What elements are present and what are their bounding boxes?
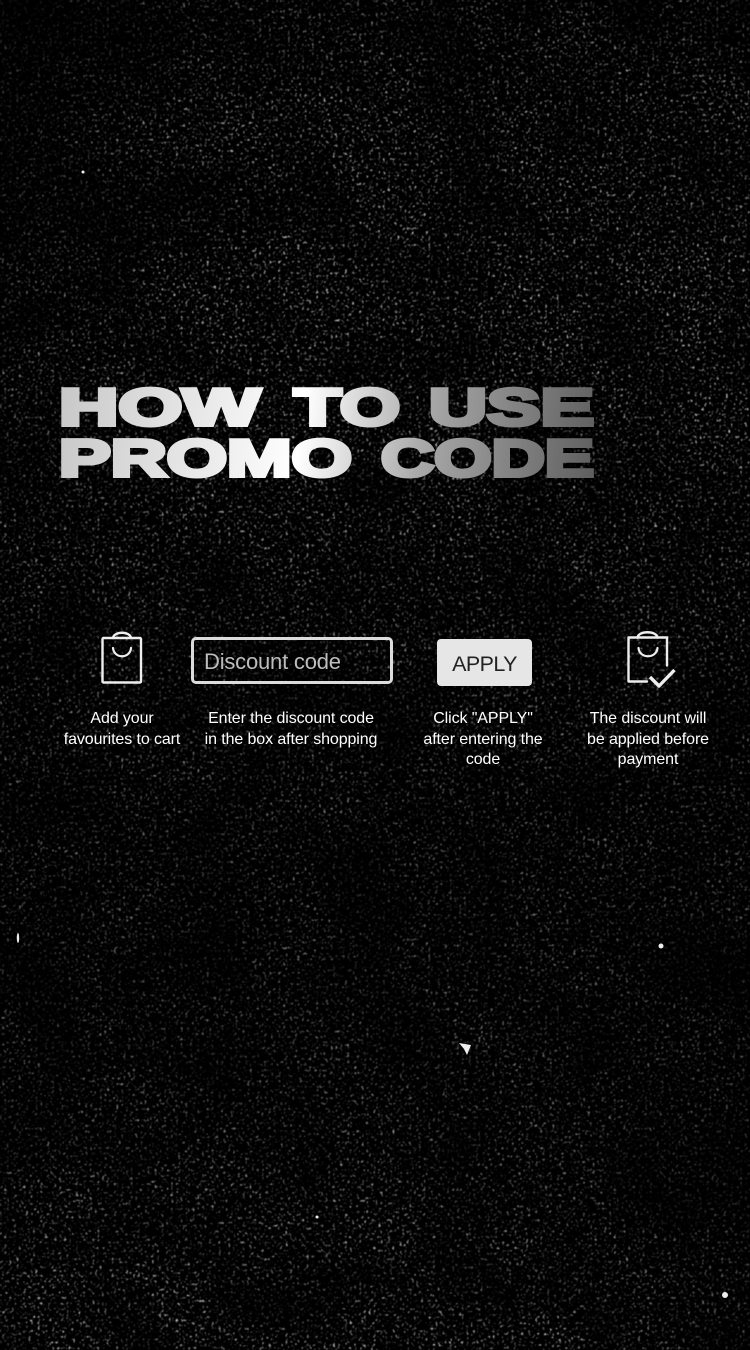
caption: discount applied: be applied before <box>587 730 709 748</box>
title: HOW TO USE PROMO CODE: TO <box>294 379 400 437</box>
caption: enter the code: in the box after shopping <box>205 730 377 748</box>
button: apply <box>437 639 532 686</box>
button: apply: APPLY <box>452 652 517 676</box>
input: discount code box: Discount code <box>204 649 341 674</box>
caption: add to cart <box>64 710 180 748</box>
caption: enter the code <box>205 710 377 748</box>
caption: click apply: Click "APPLY" <box>433 710 533 727</box>
caption: click apply: code <box>466 751 500 768</box>
caption: discount applied <box>587 710 709 768</box>
caption: add to cart: favourites to cart <box>64 730 180 748</box>
caption: click apply <box>423 710 543 768</box>
input: discount code box <box>191 637 393 684</box>
title: HOW TO USE PROMO CODE: USE <box>429 379 594 437</box>
title: HOW TO USE PROMO CODE: PROMO <box>59 430 352 488</box>
title: HOW TO USE PROMO CODE: CODE <box>381 430 594 488</box>
caption: click apply: after entering the <box>423 730 543 748</box>
caption: discount applied: payment <box>618 751 678 768</box>
caption: add to cart: Add your <box>90 710 154 727</box>
caption: discount applied: The discount will <box>590 710 706 727</box>
title: HOW TO USE PROMO CODE: HOW <box>59 379 261 437</box>
caption: enter the code: Enter the discount code <box>208 710 374 727</box>
